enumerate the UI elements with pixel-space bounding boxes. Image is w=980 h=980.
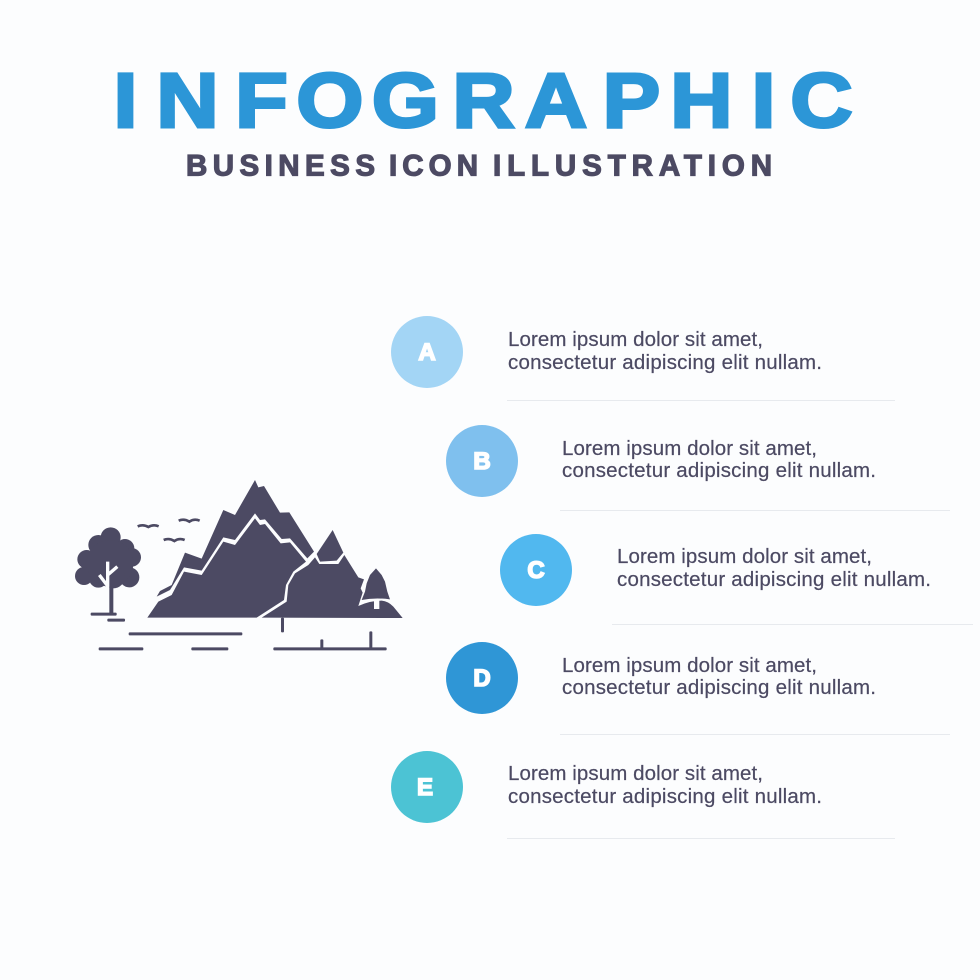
text A: consectetur adipiscing elit nullam. (508, 351, 822, 374)
step B (446, 425, 950, 510)
subtitle: ICON (389, 150, 478, 182)
circle E (391, 751, 463, 823)
icon: mountain landscape (75, 480, 403, 650)
circle A (391, 316, 463, 388)
circle A: A (418, 339, 436, 366)
step D (446, 642, 950, 734)
text E: Lorem ipsum dolor sit amet, (508, 762, 763, 785)
subtitle: ILLUSTRATION (493, 150, 772, 182)
step C (500, 534, 973, 624)
subtitle: BUSINESS (186, 150, 375, 182)
step E (391, 751, 895, 838)
text D: consectetur adipiscing elit nullam. (562, 676, 876, 699)
text B: Lorem ipsum dolor sit amet, (562, 437, 817, 460)
circle D (446, 642, 518, 714)
icon: round tree (75, 527, 141, 613)
text A: Lorem ipsum dolor sit amet, (508, 328, 763, 351)
circle C: C (527, 557, 545, 584)
circle B: B (473, 448, 491, 475)
text E: consectetur adipiscing elit nullam. (508, 785, 822, 808)
text C: Lorem ipsum dolor sit amet, (617, 545, 872, 568)
icon: ground lines (91, 613, 387, 650)
circle C (500, 534, 572, 606)
icon: front mountain (147, 518, 306, 618)
circle B (446, 425, 518, 497)
icon: back mountain (157, 480, 314, 597)
icon: pine tree (362, 568, 390, 609)
icon: birds (138, 520, 200, 541)
text D: Lorem ipsum dolor sit amet, (562, 654, 817, 677)
circle D: D (473, 665, 491, 692)
circle E: E (417, 774, 433, 801)
icon: small peak (317, 530, 343, 562)
icon: right mountain (262, 555, 403, 618)
text C: consectetur adipiscing elit nullam. (617, 568, 931, 591)
step A (391, 316, 895, 400)
title: INFOGRAPHIC (113, 58, 853, 144)
text B: consectetur adipiscing elit nullam. (562, 459, 876, 482)
